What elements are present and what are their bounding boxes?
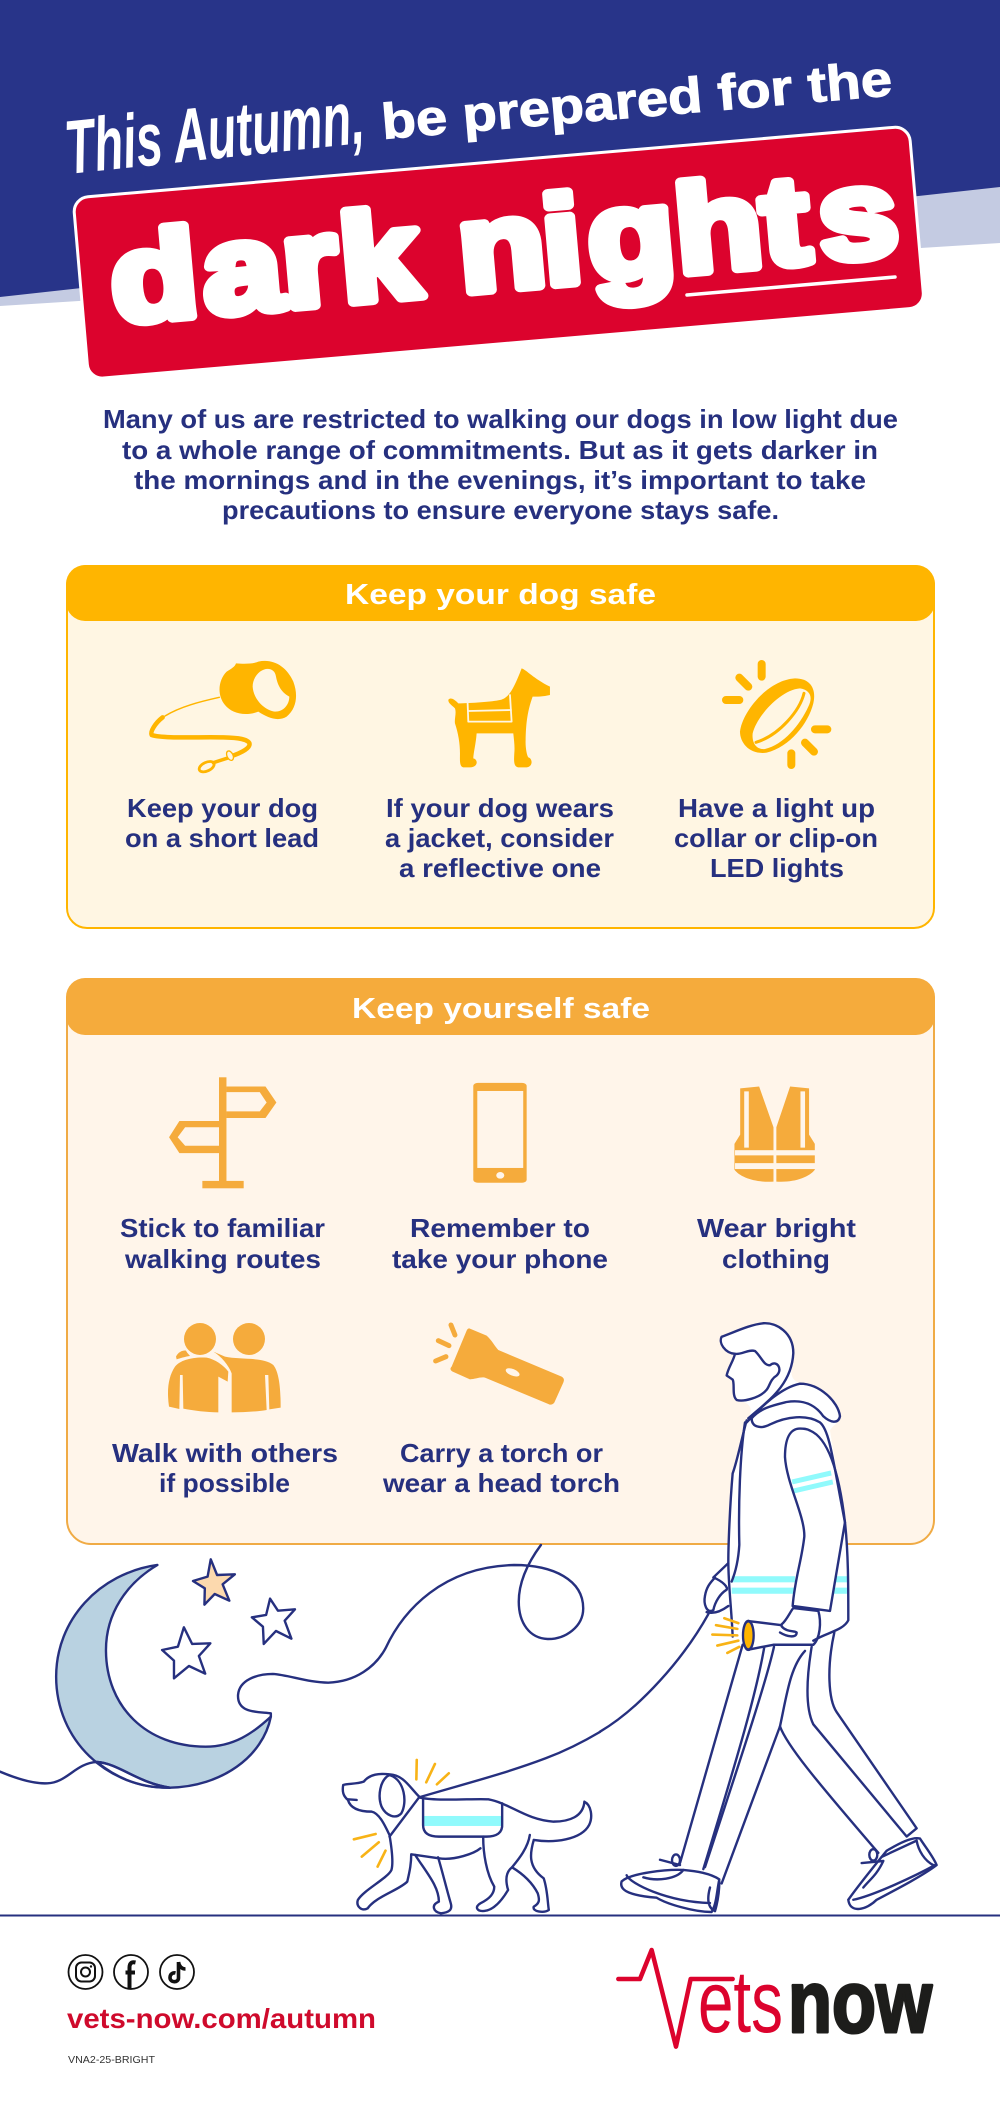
heading: keep your dog safe: Keep your dog safe bbox=[345, 579, 656, 611]
label: bright clothing: Wear bright bbox=[697, 1213, 856, 1243]
heading: keep yourself safe: Keep yourself safe bbox=[352, 993, 650, 1025]
panel: keep yourself safe bbox=[66, 978, 935, 1544]
icon: light up collar bbox=[726, 664, 827, 765]
icon: phone bbox=[473, 1083, 527, 1183]
intro text: precautions to ensure everyone stays safe. bbox=[222, 495, 779, 525]
icon: torch bbox=[436, 1325, 564, 1405]
intro text: Many of us are restricted to walking our dogs in low light due bbox=[103, 404, 898, 434]
label: carry a torch: wear a head torch bbox=[382, 1468, 620, 1498]
icon: hi-vis vest bbox=[734, 1087, 815, 1182]
intro text: the mornings and in the evenings, it’s important to take bbox=[134, 465, 866, 495]
header background band bbox=[0, 0, 1000, 306]
label: take your phone: take your phone bbox=[392, 1244, 608, 1274]
label: light up collar: LED lights bbox=[710, 853, 844, 883]
label: short lead: Keep your dog bbox=[127, 793, 318, 823]
label: bright clothing: clothing bbox=[722, 1244, 830, 1274]
title: this autumn, be prepared for the: This Autumn, bbox=[61, 75, 368, 191]
illustration: crescent moon with stars and line bbox=[0, 1545, 583, 1788]
title banner: dark nights: dark nights bbox=[105, 143, 903, 350]
intro text bbox=[103, 404, 898, 525]
label: take your phone bbox=[392, 1213, 608, 1274]
icon: tiktok bbox=[160, 1955, 194, 1989]
label: reflective jacket: a reflective one bbox=[399, 853, 601, 883]
illustration: walking man with torch and lead bbox=[600, 1323, 937, 1912]
label: reflective jacket: a jacket, consider bbox=[385, 823, 614, 853]
vets now logo bbox=[618, 1950, 932, 2051]
label: short lead bbox=[125, 793, 319, 853]
vets now logo: now bbox=[788, 1952, 932, 2051]
label: light up collar bbox=[674, 793, 878, 883]
label: reflective jacket bbox=[385, 793, 614, 883]
icon: instagram bbox=[68, 1955, 102, 1989]
title: this autumn, be prepared for the: be prepared for the bbox=[379, 50, 894, 150]
ground line bbox=[0, 1914, 1000, 1916]
vets now logo: ets bbox=[698, 1952, 783, 2051]
label: light up collar: Have a light up bbox=[678, 793, 875, 823]
label: familiar routes: walking routes bbox=[124, 1244, 321, 1274]
icon: retractable lead bbox=[151, 661, 296, 774]
label: walk with others bbox=[112, 1438, 338, 1498]
label: bright clothing bbox=[697, 1213, 856, 1274]
social media icons bbox=[68, 1955, 194, 1989]
intro text: to a whole range of commitments. But as it gets darker in bbox=[122, 435, 878, 465]
icon: dog in a reflective jacket bbox=[448, 668, 550, 767]
label: walk with others: Walk with others bbox=[112, 1438, 338, 1468]
label: familiar routes: Stick to familiar bbox=[120, 1213, 325, 1243]
label: short lead: on a short lead bbox=[125, 823, 319, 853]
reference code: VNA2-25-BRIGHT bbox=[68, 2054, 156, 2066]
website url: vets-now.com/autumn bbox=[67, 2003, 376, 2034]
icon: facebook bbox=[114, 1955, 148, 1989]
label: reflective jacket: If your dog wears bbox=[386, 793, 614, 823]
illustration: dog in reflective jacket on a lead bbox=[343, 1732, 600, 1913]
icon: two people walking together bbox=[168, 1323, 281, 1412]
label: familiar routes bbox=[120, 1213, 325, 1274]
panel: keep your dog safe bbox=[66, 565, 935, 928]
title: this autumn, be prepared for the bbox=[61, 50, 894, 191]
label: take your phone: Remember to bbox=[410, 1213, 590, 1243]
label: walk with others: if possible bbox=[159, 1468, 290, 1498]
label: carry a torch bbox=[382, 1438, 620, 1498]
label: light up collar: collar or clip-on bbox=[674, 823, 878, 853]
label: carry a torch: Carry a torch or bbox=[400, 1438, 603, 1468]
icon: signpost bbox=[169, 1077, 276, 1188]
